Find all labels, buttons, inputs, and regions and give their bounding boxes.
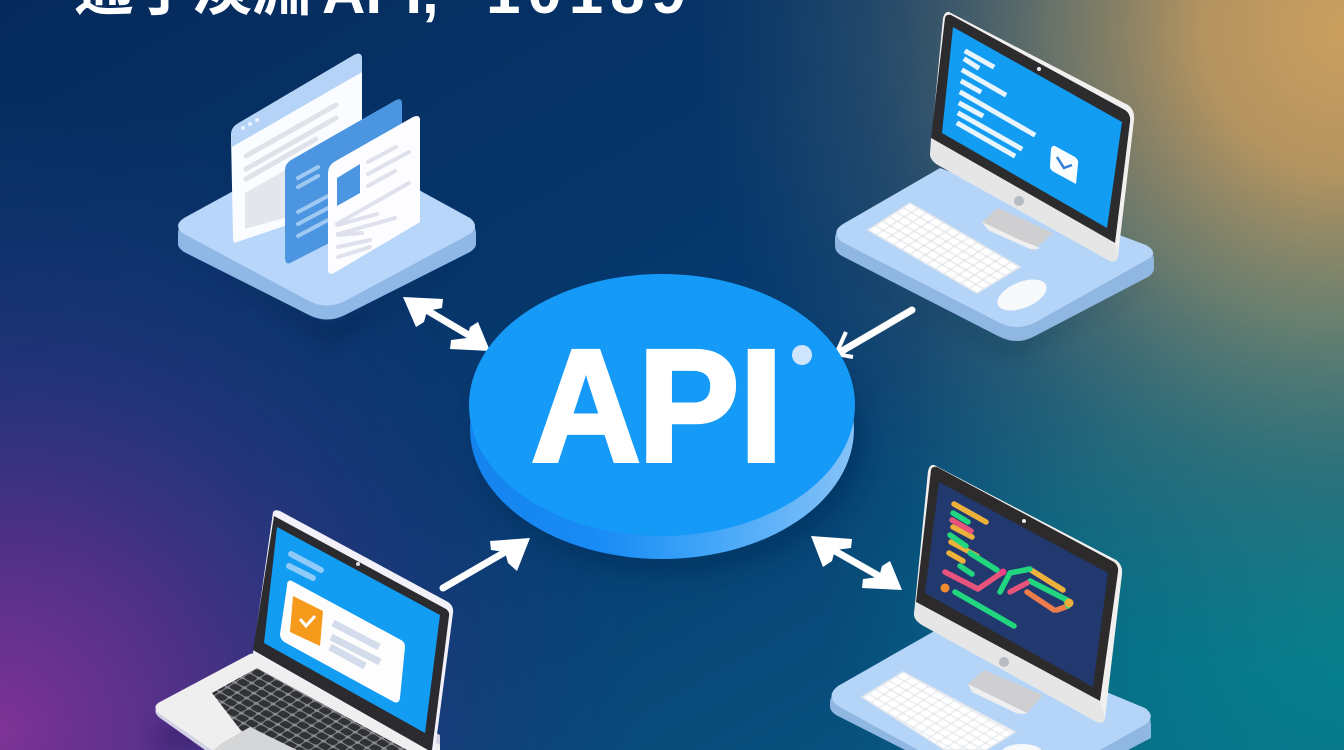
arrow: desktop to API	[836, 310, 912, 357]
touchpad	[214, 727, 297, 750]
mouse	[993, 273, 1051, 317]
documents platform	[178, 144, 476, 320]
disc side	[470, 299, 854, 559]
monitor stand	[982, 208, 1053, 250]
coding mouse	[1002, 744, 1042, 750]
arrow: coding monitor to API (two-way)	[811, 536, 902, 590]
laptop keyboard	[212, 668, 407, 750]
title (cropped at top edge)	[74, 0, 686, 27]
arrow: documents to API (two-way)	[403, 297, 490, 351]
laptop screen	[253, 510, 453, 750]
check badge	[1050, 146, 1078, 184]
API label: P	[638, 317, 739, 496]
status dot	[792, 345, 812, 365]
code lines	[945, 504, 1068, 626]
panel: laptop bottom left	[150, 510, 453, 750]
panel: desktop computer top right	[835, 12, 1160, 355]
arrow: laptop to API	[443, 538, 530, 588]
white profile document	[328, 116, 420, 274]
API label	[531, 316, 783, 496]
disc top	[469, 274, 855, 536]
coding monitor	[914, 465, 1122, 722]
API label: I	[739, 316, 783, 495]
panel: coding monitor bottom right	[830, 465, 1151, 750]
laptop shadow	[150, 700, 210, 750]
platform shadow	[190, 250, 470, 345]
platform shadow	[850, 270, 1160, 355]
laptop base	[155, 653, 440, 750]
panel: documents on platform	[178, 54, 476, 345]
API label: A	[531, 317, 641, 496]
screen text lines	[959, 52, 1033, 155]
disc shadow	[473, 305, 863, 575]
panel: API disc	[469, 274, 863, 575]
coding platform	[830, 625, 1151, 750]
desktop platform	[835, 168, 1154, 341]
notification card	[280, 581, 405, 702]
monitor	[930, 12, 1134, 261]
coding monitor stand	[968, 670, 1043, 713]
web page document	[231, 54, 362, 242]
orange check icon	[290, 596, 323, 646]
keyboard	[868, 203, 1020, 293]
coding keyboard	[862, 672, 1015, 750]
blue document	[285, 99, 402, 263]
